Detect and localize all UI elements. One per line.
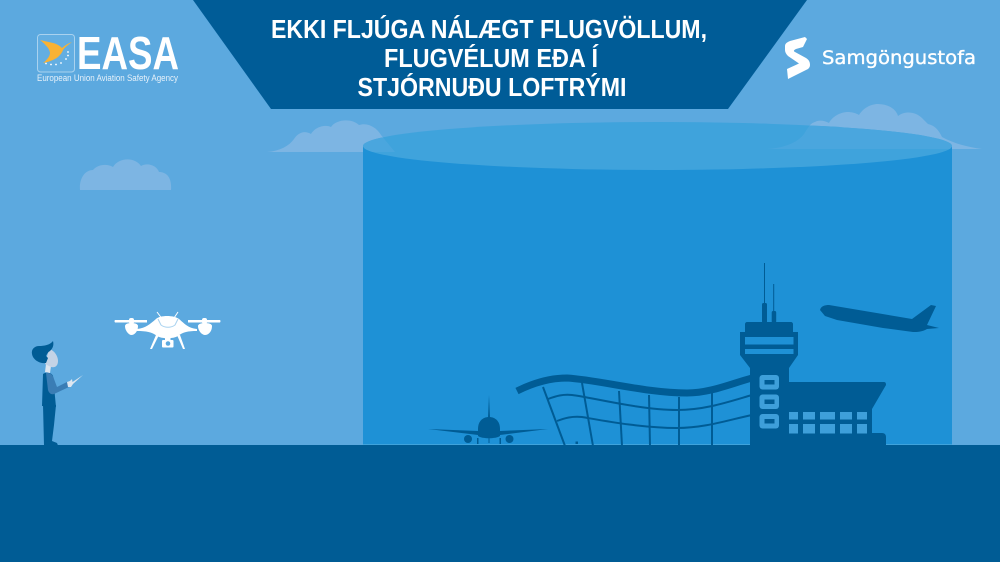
terminal roof: [517, 378, 752, 393]
cylinder top ellipse: [363, 122, 952, 170]
EASA wordmark: EASA: [77, 27, 179, 79]
building windows: [789, 412, 867, 434]
antennas: [762, 263, 776, 323]
cloud: behind cylinder left: [267, 120, 395, 152]
title text: STJÓRNUÐU LOFTRÝMI: [358, 72, 626, 102]
Samgöngustofa logo: [785, 37, 976, 79]
title text: EKKI FLJÚGA NÁLÆGT FLUGVÖLLUM,: [271, 14, 707, 44]
cab windows: [745, 337, 794, 354]
hair: [32, 341, 53, 363]
hand and remote: [67, 375, 83, 387]
Samgöngustofa wordmark: Samgöngustofa: [822, 47, 976, 69]
title banner: [193, 0, 807, 109]
tower windows: [760, 375, 779, 428]
icon: person with remote: [32, 341, 83, 446]
airspace cylinder: [363, 122, 952, 445]
arm: [46, 373, 69, 394]
torso: [42, 373, 56, 407]
icon: parked plane: [428, 395, 548, 444]
control tower: [740, 263, 886, 446]
legs: [43, 405, 58, 446]
terminal building: [517, 378, 752, 446]
icon: drone: [114, 312, 220, 349]
EASA logo: [37, 27, 179, 83]
terminal glazing: [543, 383, 752, 446]
clouds seen through ellipse: [363, 126, 952, 152]
cloud: left: [80, 159, 171, 190]
icon: EASA bird: [38, 34, 74, 72]
ground: [0, 445, 1000, 562]
title text: [271, 14, 707, 102]
EASA subtitle: European Union Aviation Safety Agency: [37, 73, 178, 83]
title text: FLUGVÉLUM EÐA Í: [384, 43, 599, 73]
icon: S mark: [785, 37, 810, 79]
icon: departing plane: [820, 305, 939, 332]
neck and face: [45, 364, 51, 373]
cloud: behind cylinder right: [767, 104, 982, 149]
tower body: [740, 322, 886, 446]
